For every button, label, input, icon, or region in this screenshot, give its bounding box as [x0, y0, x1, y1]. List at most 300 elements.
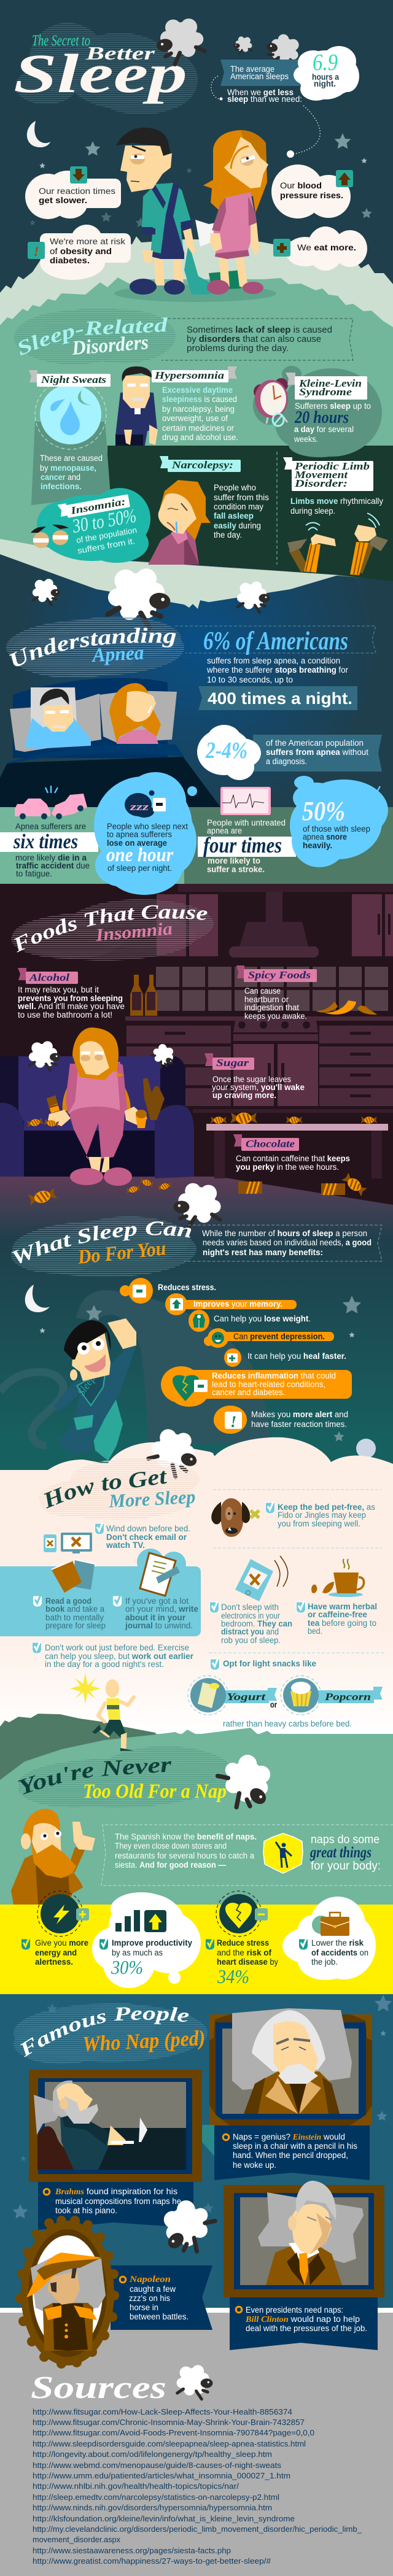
panel: insomnia — [31, 488, 150, 563]
caption: clinton: Bill Clinton would nap to help — [245, 2315, 360, 2324]
sheep: famous section — [152, 2192, 222, 2262]
heading: sleep-related disorders: Sleep-Related — [18, 317, 168, 355]
ribbon: narcolepsy: Narcolepsy: — [171, 459, 233, 471]
sheep: white left — [33, 579, 60, 605]
benefit: more alert: ! — [230, 1413, 236, 1431]
panel: blue tips — [0, 1549, 201, 1636]
list: source urls: http://www.greatist.com/happiness/27-ways-to-get-better-sleep/# — [33, 2556, 271, 2566]
cloud: 2-4%: 2-4% — [205, 738, 247, 764]
panel: kleine-levin: weeks. — [294, 435, 318, 444]
list: source urls: http://www.sleepdisordersguide.com/sleepapnea/sleep-apnea-statistics.html — [33, 2439, 306, 2448]
list: source urls: http://www.fitsugar.com/Chronic-Insomnia-May-Shrink-Your-Brain-7432857 — [33, 2418, 305, 2427]
tip: exercise — [32, 1642, 194, 1669]
cloud: 2-4%: suffers from apnea without — [266, 748, 368, 757]
panel: energy: energy and — [35, 1948, 77, 1957]
tip: exercise: can help you sleep, but work out earlier — [45, 1652, 194, 1661]
character: tired man — [116, 128, 195, 295]
banner: 6% of Americans: where the sufferer stops breathing for — [206, 665, 348, 675]
bubble: blood pressure — [271, 164, 353, 219]
text: when we get less sleep — [227, 88, 302, 104]
heading: how to get more sleep — [39, 1458, 200, 1520]
caption: brahms: musical compositions from naps he — [55, 2197, 181, 2206]
list: source urls: http://www.fitsugar.com/Avoid-Foods-Prevent-Insomnia-7907844?page=0,0,0 — [33, 2428, 314, 2437]
cloud: one hour: of sleep per night. — [107, 864, 172, 873]
icon: exclamation — [28, 242, 45, 259]
tip: pet-free bed: Fido or Jingles may keep — [278, 1510, 366, 1520]
list: source urls: movement_disorder.aspx — [33, 2535, 120, 2544]
ribbon: spicy foods — [236, 965, 317, 982]
heading: understanding apnea: Apnea — [91, 641, 144, 666]
panel: energy — [21, 1891, 89, 1967]
character: jogger — [92, 1679, 134, 1751]
list: source urls: http://sleep.emedtv.com/narcolepsy/statistics-on-narcolepsy-p2.html — [33, 2493, 279, 2502]
caption: einstein: sleep in a chair with a pencil in his — [233, 2141, 357, 2151]
heading: foods that cause insomnia: Foods That Cause — [14, 905, 208, 953]
benefit: lose weight — [189, 1310, 311, 1332]
panel: hypersomnia — [115, 366, 238, 446]
text: when we get less sleep: sleep than we need: — [227, 95, 302, 104]
caption: napoleon: horse in — [130, 2303, 158, 2312]
heading: never too old for a nap: You're Never — [18, 1760, 171, 1795]
panel: alcohol: It may relax you, but it — [18, 985, 99, 994]
benefit: reduces stress — [120, 1278, 216, 1304]
panel: periodic limb: during sleep. — [290, 506, 335, 516]
tip: herbal tea: or caffeine-free — [308, 1610, 367, 1619]
tip: wind down — [44, 1523, 190, 1553]
list: source urls: http://klsfoundation.org/kleine/levin/info/what_is_kleine_levin_syndrome — [33, 2514, 295, 2523]
sheep: sleep section — [174, 1183, 221, 1228]
caption: einstein — [214, 2125, 370, 2180]
list: source urls: http://www.nhlbi.nih.gov/health/health-topics/topics/nar/ — [33, 2481, 239, 2491]
icon: yogurt — [188, 1676, 277, 1715]
tip: exercise: in the day for a good night's rest. — [45, 1660, 164, 1669]
heading: foods that cause insomnia: Insomnia — [95, 919, 173, 945]
tip: wind down: Wind down before bed. — [106, 1524, 190, 1533]
cloud: 6.9 hours — [294, 46, 359, 101]
heading: understanding apnea: Understanding — [9, 627, 176, 667]
caption: napoleon — [111, 2265, 212, 2330]
banner: spanish siesta: restaurants for several hours to catch a — [115, 1851, 254, 1860]
panel: narcolepsy: suffer from this — [214, 493, 269, 502]
list: source urls: http://www.fitsugar.com/How-Lack-Sleep-Affects-Your-Health-8856374 — [33, 2407, 292, 2416]
benefit: reduces inflammation — [161, 1366, 352, 1407]
character: sleep superhero: Sleep — [75, 1372, 98, 1398]
list: sleep benefits — [120, 1278, 352, 1434]
panel: spicy foods: heartburn or — [244, 995, 289, 1004]
list: source urls: http://www.umm.edu/patiented/articles/what_insomnia_000027_1.htm — [33, 2471, 290, 2480]
ribbon: sugar — [204, 1053, 254, 1070]
tip: electronics: rob you of sleep. — [221, 1636, 281, 1645]
heading: never too old for a nap — [18, 1747, 228, 1808]
panel: blue tips: about it in your — [125, 1613, 186, 1622]
caption: einstein: Naps = genius? Einstein would — [233, 2132, 345, 2141]
bubble: obesity and diabetes: diabetes. — [50, 256, 90, 265]
panel: chocolate: Can contain caffeine that keeps — [236, 1154, 350, 1163]
cloud: one hour: one hour — [106, 843, 173, 865]
cream clouds — [0, 1437, 393, 1498]
panel: six times: six times — [13, 830, 78, 853]
icon: chili peppers — [316, 1000, 377, 1015]
banner: 6% of Americans — [175, 626, 376, 684]
character: bearded old man — [11, 1809, 95, 1905]
panel: heart disease: 34% — [217, 1965, 249, 1987]
tip: pet-free bed: you from sleeping well. — [278, 1519, 360, 1528]
panel: spicy foods — [236, 965, 377, 1021]
title: The Secret to — [32, 33, 90, 49]
panel: energy: Give you more — [35, 1938, 88, 1947]
bubble: obesity and diabetes: of obesity and — [50, 247, 112, 256]
panel: sugar: up craving more. — [212, 1091, 276, 1100]
icon: zzz thought — [125, 791, 166, 818]
tip: wind down: Don't check email or — [106, 1533, 187, 1542]
title: Better — [85, 42, 155, 64]
sheep: on banner — [262, 30, 303, 71]
ribbon: hypersomnia: Hypersomnia — [154, 369, 225, 381]
panel: six times — [0, 786, 98, 878]
ribbon: chocolate — [233, 1134, 299, 1151]
panel: alcohol: to use the bathroom a lot! — [18, 1010, 112, 1019]
benefit: reduces inflammation: Reduces inflammation that could — [212, 1371, 336, 1380]
panel: sugar: your system, you'll wake — [212, 1083, 305, 1092]
banner: 400 times a night: 400 times a night. — [208, 689, 352, 708]
cloud: 6.9 hours: night. — [314, 79, 336, 88]
bubble: reaction times — [25, 166, 121, 219]
panel: heart disease: Reduce stress — [217, 1938, 269, 1947]
caption: clinton — [230, 2297, 378, 2350]
cloud: accidents: of accidents on — [311, 1948, 368, 1957]
illustration: woman on couch — [0, 1027, 194, 1186]
panel: four times: suffer a stroke. — [207, 865, 265, 874]
panel: kleine-levin: a day for several — [294, 425, 354, 434]
panel: periodic limb — [283, 457, 388, 575]
sheep: white large — [106, 566, 173, 629]
icon: exclamation: ! — [34, 244, 39, 259]
ribbon: periodic limb — [283, 457, 373, 491]
panel: blue tips: If you've got a lot — [125, 1596, 189, 1606]
icon: journal — [140, 1553, 180, 1596]
icon: stretching figure badge — [263, 1833, 303, 1873]
icons: candies on table — [211, 1113, 377, 1124]
panel: energy: alertness. — [35, 1957, 73, 1967]
panel: hypersomnia: sleepiness is caused — [162, 395, 237, 404]
banner: spanish siesta — [101, 1825, 393, 1886]
icon: tea cup — [311, 1559, 364, 1597]
tip: electronics — [210, 1556, 292, 1645]
cape swirl — [0, 1290, 271, 1445]
panel: heart disease: and the risk of — [217, 1948, 272, 1957]
heading: how to get more sleep: How to Get — [44, 1471, 167, 1509]
icon: dog — [211, 1498, 259, 1537]
banner: disorders intro — [161, 319, 353, 360]
icon: vibrating phone — [235, 1556, 288, 1601]
banner: average American sleeps: American sleeps — [230, 72, 289, 81]
panel: six times: to fatigue. — [16, 869, 52, 878]
ribbon: night sweats — [29, 370, 111, 387]
ribbon: periodic limb: Periodic Limb — [294, 460, 370, 472]
benefit: reduces inflammation: lead to heart-related conditions, — [212, 1380, 325, 1389]
caption: brahms: Brahms found inspiration for his — [55, 2187, 177, 2196]
ribbon: insomnia: Insomnia: — [69, 495, 126, 517]
sheep: on couch right — [148, 1040, 179, 1072]
sheep: small — [233, 36, 252, 54]
icon: popcorn: Popcorn — [324, 1691, 371, 1703]
panel: four times: People with untreated — [207, 818, 286, 827]
sheep: cloud — [145, 1424, 204, 1482]
panel: chocolate — [233, 1134, 350, 1172]
cloud: accidents: Lower the risk — [311, 1938, 364, 1947]
panel: night sweats: cancer and — [41, 473, 80, 482]
moon — [27, 121, 50, 147]
character: sleeping woman — [148, 480, 211, 565]
panel: blue tips: bath to mentally — [45, 1613, 104, 1622]
caption: clinton: Even presidents need naps: — [246, 2305, 343, 2315]
cloud: 2-4%: a diagnosis. — [266, 757, 307, 766]
panel: narcolepsy: People who — [214, 483, 256, 492]
panel: spicy foods: keeps you awake. — [244, 1011, 307, 1021]
benefit: improves memory — [165, 1293, 297, 1315]
panel: four times: four times — [203, 833, 282, 857]
benefit: heal faster: It can help you heal faster. — [247, 1352, 346, 1361]
list: source urls: http://longevity.about.com/od/lifelongenergy/tp/healthy_sleep.htm — [33, 2450, 272, 2459]
text: naps do great things: for your body: — [311, 1860, 381, 1873]
ribbon: sugar: Sugar — [216, 1057, 249, 1069]
panel: sugar: Once the sugar leaves — [212, 1075, 291, 1084]
ribbon: periodic limb: Movement — [294, 469, 348, 481]
banner: benefits intro — [184, 1225, 382, 1261]
panel: sugar — [204, 1053, 305, 1100]
icon: chocolate bar — [47, 1096, 63, 1123]
panel: hypersomnia: Excessive daytime — [162, 385, 233, 395]
panel: blue tips: journal to unwind. — [125, 1621, 193, 1630]
panel: spicy foods: Can cause — [244, 986, 281, 996]
cloud: one hour: People who sleep next — [107, 822, 188, 831]
caption: napoleon: between battles. — [130, 2312, 189, 2321]
cloud: 50%: heavily. — [303, 841, 332, 850]
panel: blue tips: Read a good — [45, 1596, 91, 1606]
heading: what sleep can do for you: Do For You — [76, 1237, 167, 1269]
benefit: heal faster — [224, 1348, 346, 1367]
bubble: reaction times: Our reaction times — [39, 187, 115, 196]
tip: wind down: watch TV. — [106, 1541, 145, 1550]
caption: napoleon: Napoleon — [129, 2275, 171, 2284]
benefit: more alert — [214, 1406, 348, 1434]
panel: night sweats: infections. — [41, 482, 82, 491]
panel: night sweats: by menopause, — [40, 463, 96, 473]
panel: kleine-levin: 20 hours — [294, 408, 349, 427]
panel: blue tips: book and take a — [45, 1604, 104, 1614]
bubble: eat more: We eat more. — [297, 243, 356, 252]
banner: disorders intro: problems during the day. — [187, 343, 289, 354]
text: naps do great things: naps do some — [311, 1833, 379, 1846]
panel: narcolepsy: fall asleep — [214, 511, 254, 520]
tip: light snacks: Opt for light snacks like — [223, 1659, 316, 1668]
benefit: more alert: Makes you more alert and — [251, 1410, 348, 1419]
heading: how to get more sleep: More Sleep — [108, 1486, 196, 1512]
panel: hypersomnia: by narcolepsy, being — [162, 404, 235, 414]
icon: crashed cars — [15, 786, 87, 819]
pillow — [195, 220, 235, 247]
tip: electronics: Don't sleep with — [221, 1603, 279, 1612]
benefit: more alert: have faster reaction times. — [251, 1420, 347, 1429]
icon: bottles behind couch — [143, 1078, 165, 1120]
list: source urls: http://www.siestaawareness.org/pages/siesta-facts.php — [33, 2546, 231, 2555]
benefit: prevent depression — [204, 1328, 334, 1348]
panel: four times: more likely to — [208, 856, 260, 865]
heading: famous people who napped: Famous People — [20, 2007, 189, 2057]
heading: what sleep can do for you: What Sleep Can — [11, 1221, 192, 1263]
tip: exercise: Don't work out just before bed. Exercise — [45, 1643, 189, 1652]
ribbon: alcohol — [18, 968, 78, 984]
panel: insomnia: of the population — [76, 525, 138, 545]
panel: narcolepsy: condition may — [214, 502, 263, 511]
panel: spicy foods: indigestion that — [244, 1003, 299, 1012]
ribbon: kleine-levin: Kleine-Levin — [298, 377, 362, 389]
character: pink woman — [47, 1027, 147, 1186]
tip: electronics: electronics in your — [221, 1611, 280, 1620]
bubble: obesity and diabetes: We're more at risk — [50, 237, 125, 246]
icon: zzz thought: zzz — [129, 801, 149, 813]
panel: night sweats: These are caused — [40, 454, 103, 463]
panel: four times — [198, 787, 296, 874]
icon: sweat drops — [50, 390, 91, 435]
panel: narcolepsy: the day. — [214, 530, 242, 540]
banner: 6% of Americans: suffers from sleep apnea, a condition — [207, 656, 340, 665]
banner: benefits intro: needs varies based on individual needs, a good — [203, 1238, 372, 1247]
panel: six times: Apnea sufferers are — [15, 822, 86, 831]
character: awake man — [25, 687, 91, 749]
banner: average American sleeps — [220, 60, 307, 86]
icon: books — [52, 1560, 95, 1593]
ribbon: hypersomnia — [152, 366, 237, 382]
moon — [25, 1285, 50, 1312]
banner: spanish siesta: They even close down stores and — [115, 1841, 227, 1851]
icon: up arrow — [336, 170, 353, 187]
benefit: reduces stress: Reduces stress. — [158, 1283, 216, 1292]
cloud: one hour: to apnea sufferers — [107, 830, 172, 839]
bubble: reaction times: get slower. — [39, 196, 87, 205]
caption: einstein: he woke up. — [233, 2160, 276, 2170]
benefit: prevent depression: Can prevent depression. — [233, 1332, 325, 1341]
panel: alcohol — [17, 968, 157, 1019]
caption: clinton: deal with the pressures of the job. — [246, 2324, 367, 2333]
cloud: 50%: of those with sleep — [303, 824, 370, 834]
bubble: eat more — [273, 226, 367, 271]
icon: down arrow — [70, 166, 87, 184]
heading: sources: Sources — [31, 2370, 166, 2405]
stars — [13, 1995, 392, 2219]
cloud: productivity: 30% — [111, 1956, 143, 1978]
panel: six times: more likely die in a — [15, 853, 87, 862]
sheep: title top — [153, 15, 207, 67]
panel: six times: traffic accident due — [16, 861, 90, 870]
caption: brahms — [38, 2182, 193, 2230]
character: snoring woman — [109, 683, 161, 744]
panel: kleine-levin — [253, 366, 382, 457]
bubble: obesity and diabetes — [28, 225, 131, 280]
panel: narcolepsy — [148, 456, 269, 565]
icon: heart monitor — [220, 787, 271, 815]
text: naps do great things: great things — [309, 1844, 372, 1861]
tip: herbal tea: tea before going to — [308, 1619, 376, 1628]
illustration: bed with couple — [0, 678, 220, 807]
ribbon: kleine-levin: Syndrome — [299, 386, 352, 398]
portrait: brahms — [29, 2070, 202, 2182]
cloud: 50%: apnea snore — [303, 832, 347, 841]
cloud: productivity: Improve productivity — [112, 1938, 192, 1947]
tip: pet-free bed — [211, 1498, 375, 1537]
panel: hypersomnia: drug and alcohol use. — [162, 433, 238, 442]
ribbon: chocolate: Chocolate — [246, 1138, 295, 1150]
sheep: on couch left — [29, 1041, 60, 1071]
cloud: accidents: the job. — [311, 1957, 338, 1967]
list: source urls: http://www.webmd.com/menopause/guide/8-causes-of-night-sweats — [33, 2461, 282, 2470]
sheep: sources — [177, 2365, 212, 2399]
icon: yogurt: Yogurt — [227, 1691, 267, 1703]
panel: alcohol: well. And it'll make you have — [17, 1002, 125, 1011]
sheep: white right — [237, 582, 270, 613]
icon: plus — [273, 239, 290, 257]
ribbon: periodic limb: Disorder: — [294, 478, 348, 489]
character: sleep superhero — [54, 1318, 136, 1461]
list: source urls — [33, 2407, 362, 2566]
tip: herbal tea — [296, 1559, 377, 1636]
title — [14, 23, 198, 115]
cloud: one hour: lose on average — [107, 838, 167, 848]
banner: disorders intro: Sometimes lack of sleep is caused — [187, 325, 332, 335]
ribbon: spicy foods: Spicy Foods — [248, 969, 311, 981]
hills — [0, 1714, 393, 1780]
ribbon: night sweats: Night Sweats — [41, 374, 106, 385]
character: tired man in suit — [115, 366, 158, 446]
banner: benefits intro: night's rest has many benefits: — [203, 1248, 323, 1257]
icon: phone and monitor — [44, 1533, 92, 1553]
caption: napoleon: zzz's on his — [129, 2294, 170, 2303]
icons: falling candies and chocolate — [27, 1172, 368, 1206]
tip: light snacks: or — [270, 1700, 278, 1709]
bubble: blood pressure: pressure rises. — [280, 191, 343, 200]
heading: never too old for a nap: Too Old For a Nap — [83, 1781, 227, 1803]
ribbon: narcolepsy — [160, 456, 241, 472]
list: source urls: http://www.ninds.nih.gov/disorders/hypersomnia/hypersomnia.htm — [33, 2503, 272, 2512]
icon: tired eyes — [31, 525, 69, 548]
panel: chocolate: you perky in the wee hours. — [236, 1162, 339, 1172]
text: when we get less sleep: When we get less — [227, 88, 294, 97]
lavender moon — [356, 1439, 376, 1458]
tip: light snacks — [188, 1658, 383, 1728]
panel: hypersomnia: certain medicines or — [162, 424, 234, 433]
panel: blue tips: on your mind, write — [125, 1604, 198, 1614]
heading: famous people who napped: Who Nap (ped) — [82, 2026, 206, 2056]
arrow: dotted connectors — [211, 76, 320, 158]
text: naps do great things — [309, 1833, 381, 1873]
banner: disorders intro: by disorders that can also cause — [187, 334, 321, 344]
stars — [39, 1296, 361, 1441]
tip: electronics: bedroom. They can — [221, 1619, 292, 1628]
panel: hypersomnia: overweight, use of — [162, 414, 228, 423]
benefit: reduces inflammation: cancer and diabetes. — [212, 1388, 285, 1397]
portrait: napoleon — [15, 2216, 119, 2369]
cloud: one hour — [94, 772, 197, 895]
banner: 6% of Americans: 10 to 30 seconds, up to — [207, 675, 293, 684]
tip: electronics: distract you and — [221, 1627, 279, 1636]
panel: blue tips: prepare for sleep — [45, 1621, 106, 1630]
panel: night sweats — [29, 370, 111, 505]
ribbon: alcohol: Alcohol — [29, 972, 69, 983]
banner: 6% of Americans: 6% of Americans — [203, 627, 348, 656]
benefit: improves memory: Improves your memory. — [193, 1299, 282, 1309]
tip: pet-free bed: Keep the bed pet-free, as — [278, 1503, 375, 1512]
banner: average American sleeps: The average — [230, 64, 274, 74]
